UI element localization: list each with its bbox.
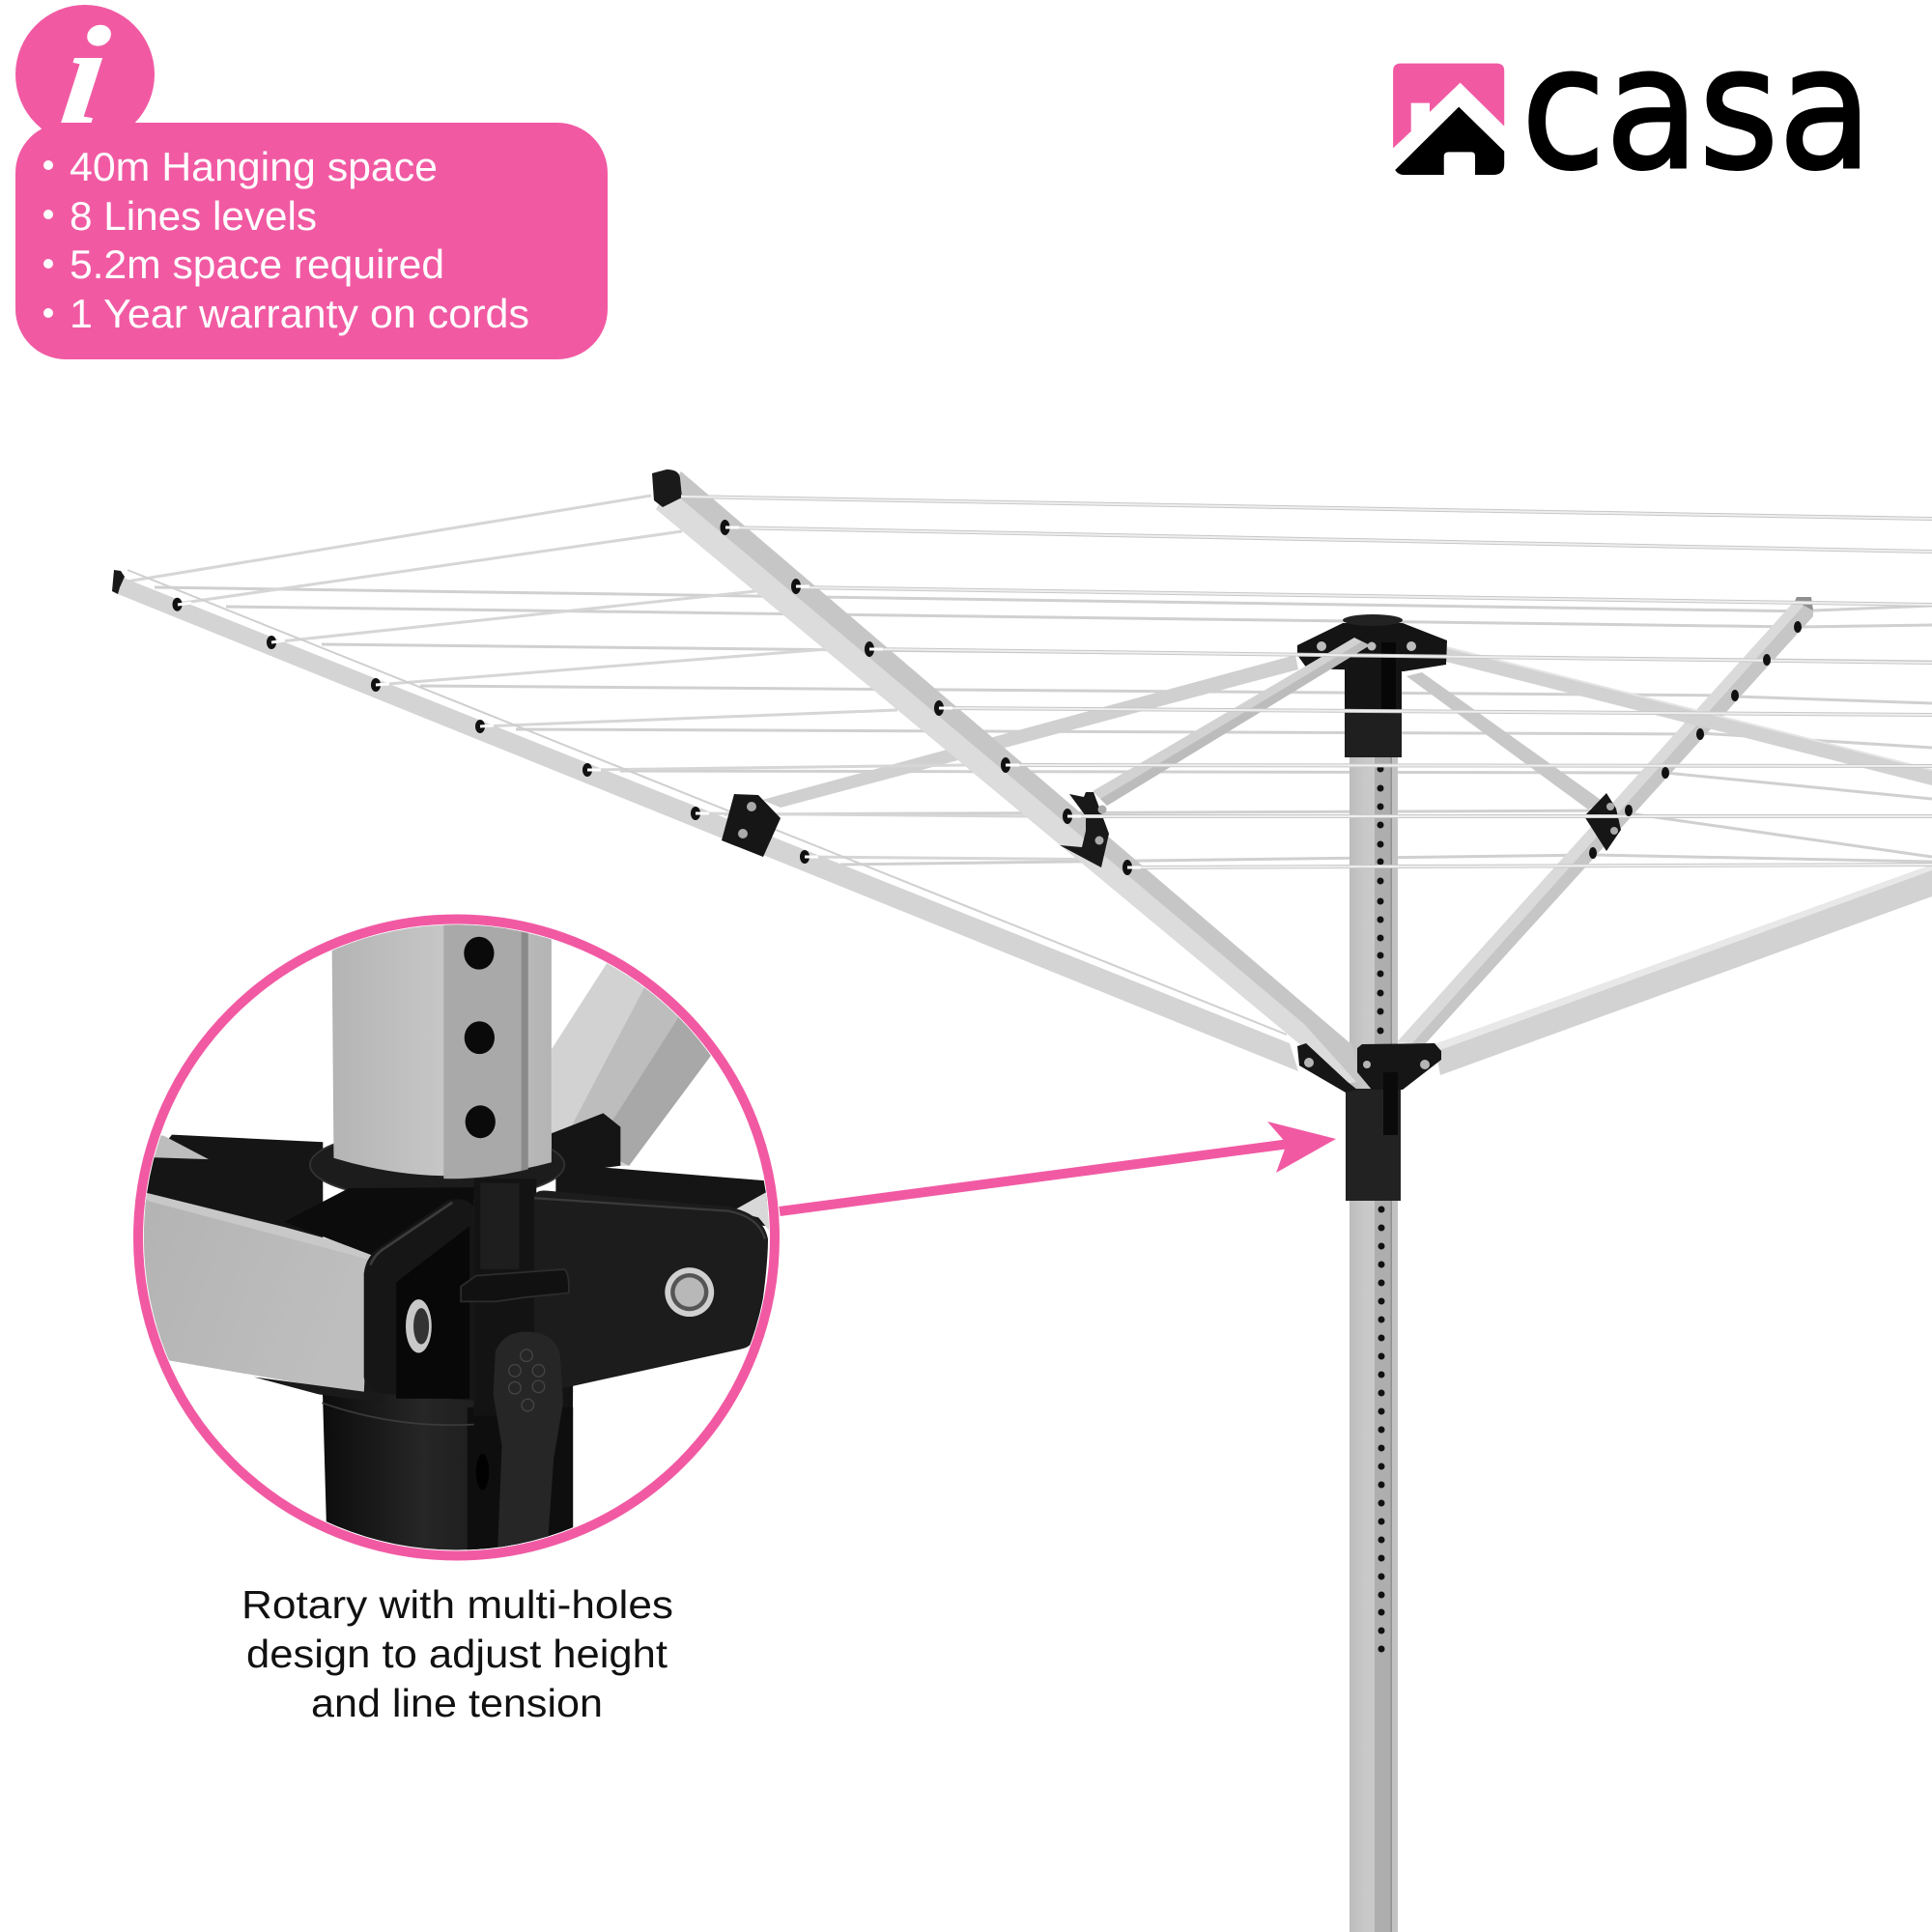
pole <box>1350 753 1398 1932</box>
arrow from detail to hub <box>780 1122 1336 1211</box>
logo house icon <box>1393 64 1504 175</box>
collar front band and hollow <box>284 1179 536 1416</box>
back arm bracket <box>1584 793 1621 851</box>
caption: Rotary with multi-holes <box>242 1582 673 1627</box>
info panel <box>15 0 608 359</box>
right bolt <box>665 1267 714 1317</box>
left arm tip cap <box>112 570 125 594</box>
caption <box>242 1582 673 1725</box>
cords: back arm to right arm <box>1594 606 1932 862</box>
handle <box>494 1332 563 1551</box>
cords: left arm to front arm <box>121 496 1127 860</box>
bullet list: 8 Lines levels <box>70 193 317 239</box>
adjustment holes <box>464 937 496 1138</box>
right bracket <box>534 1190 768 1388</box>
pink detail ring <box>138 920 775 1555</box>
front arm to right arm cords <box>681 497 1932 867</box>
front left bracket <box>364 1199 476 1401</box>
strut to front arm <box>1093 638 1370 806</box>
left arm <box>118 570 1298 1071</box>
bullet list: 1 Year warranty on cords <box>70 291 529 336</box>
collar <box>309 1144 566 1200</box>
back arm eyelets <box>1589 621 1802 859</box>
lower hub and sleeve <box>1297 1043 1441 1201</box>
upper pole <box>331 898 552 1179</box>
rear cords: left arm to back arm <box>155 587 1813 865</box>
left arm bracket <box>722 794 781 857</box>
grey sliver right <box>736 1192 769 1231</box>
info letter: i <box>53 0 116 154</box>
bullet list: 40m Hanging space <box>70 144 438 189</box>
info badge circle <box>15 5 155 144</box>
info panel background <box>15 123 608 359</box>
caption: and line tension <box>311 1681 603 1725</box>
left arm in detail <box>143 1192 371 1397</box>
rear black brackets <box>116 1113 767 1243</box>
logo wordmark: casa <box>1521 12 1872 208</box>
bullet list <box>43 144 529 336</box>
centre latch <box>461 1269 569 1301</box>
grey sliver left <box>155 1136 209 1159</box>
airer product illustration <box>112 469 1932 1932</box>
front arm tip cap <box>652 469 682 507</box>
strut to left arm <box>762 655 1298 808</box>
bullet list: 5.2m space required <box>70 242 444 287</box>
lower tube <box>322 1373 573 1554</box>
strut to back arm <box>1406 672 1604 810</box>
caption: design to adjust height <box>246 1632 668 1676</box>
casa logo <box>1393 12 1872 208</box>
front arm <box>656 471 1360 1084</box>
upper hub and sleeve <box>1297 614 1447 757</box>
left bolt <box>406 1299 432 1353</box>
left arm eyelets <box>172 598 818 864</box>
front arm eyelets <box>721 520 1141 875</box>
right arm <box>1435 865 1932 1075</box>
back strut in detail <box>552 963 711 1166</box>
back arm <box>1397 597 1813 1044</box>
front arm bracket <box>1060 792 1109 867</box>
pole holes <box>1378 765 1385 1652</box>
detail magnifier circle <box>116 898 781 1555</box>
strut to right arm <box>1446 647 1932 785</box>
